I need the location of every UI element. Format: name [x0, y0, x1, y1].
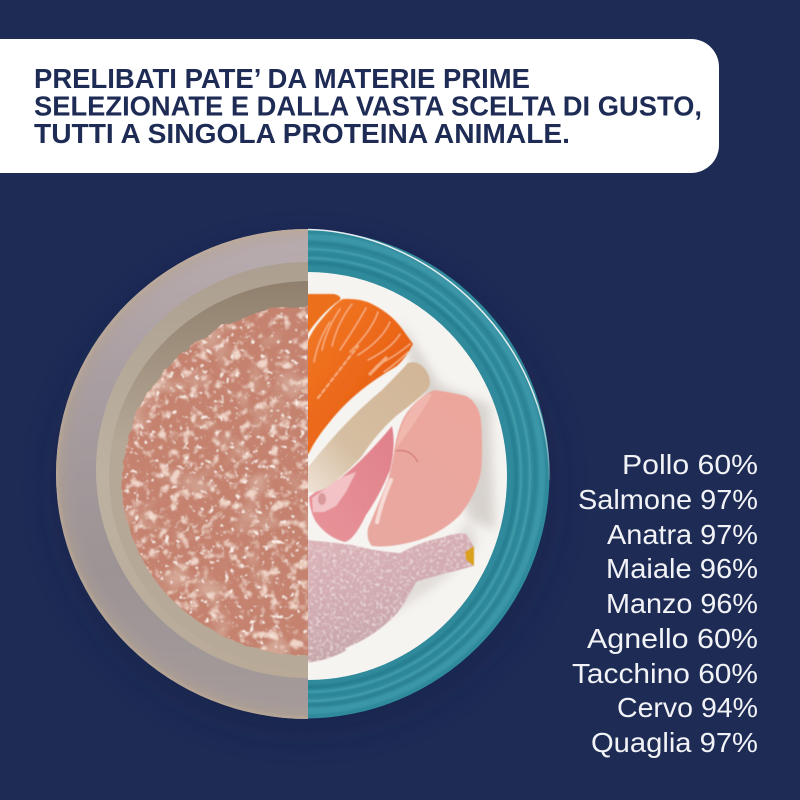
Quaglia: Quaglia 97%	[591, 727, 758, 758]
heading text	[34, 63, 702, 149]
pale chicken tender	[306, 362, 430, 492]
ingredients list	[572, 449, 758, 758]
Tacchino: Tacchino 60%	[572, 658, 758, 689]
panel: fresh ingredients plate, right half	[308, 228, 550, 718]
salmon fat lines	[314, 304, 410, 398]
food group	[306, 294, 482, 663]
drumstick bone tip	[465, 546, 474, 566]
Manzo: Manzo 96%	[606, 588, 758, 619]
Salmone: Salmone 97%	[578, 484, 758, 515]
pate	[121, 306, 308, 656]
plate white edge, upper right	[308, 230, 550, 480]
teal plate rim	[308, 228, 550, 718]
back salmon fillet	[306, 294, 340, 336]
bowl outer rim	[56, 229, 308, 719]
main salmon fillet	[306, 299, 413, 456]
heading text: SELEZIONATE E DALLA VASTA SCELTA DI GUSTO,	[34, 90, 702, 122]
plate white centre	[308, 272, 507, 680]
Cervo: Cervo 94%	[617, 692, 758, 723]
chicken breast	[368, 390, 482, 546]
panel: pate bowl, left half	[56, 229, 308, 719]
banner panel	[0, 39, 719, 173]
chicken drumstick	[306, 534, 474, 663]
heading text: TUTTI A SINGOLA PROTEINA ANIMALE.	[34, 118, 570, 149]
Maiale: Maiale 96%	[606, 553, 758, 584]
bowl well	[109, 281, 308, 543]
plate inner shadows	[398, 524, 478, 612]
Pollo: Pollo 60%	[622, 449, 758, 480]
Agnello: Agnello 60%	[587, 623, 758, 654]
small pink muscle	[309, 426, 394, 542]
heading text: PRELIBATI PATE’ DA MATERIE PRIME	[34, 63, 530, 94]
drop shadow beneath dish	[59, 248, 551, 728]
heading banner	[0, 39, 719, 173]
bowl inner lip	[96, 262, 308, 678]
salmon fillets	[306, 294, 413, 456]
Anatra: Anatra 97%	[607, 519, 758, 550]
